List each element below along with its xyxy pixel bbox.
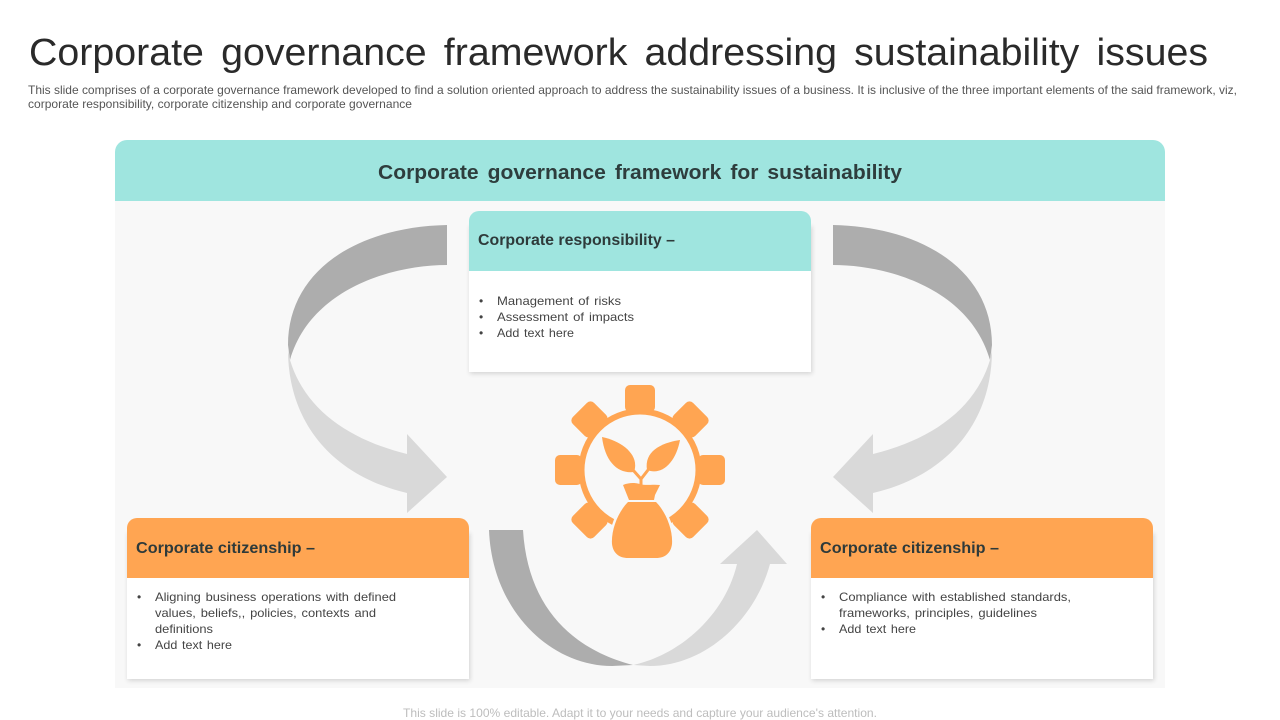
card: corporate responsibility: Management of risks xyxy=(497,294,621,308)
card: corporate citizenship left: values, beliefs,, policies, contexts and xyxy=(155,606,376,620)
card: corporate citizenship right: Compliance with established standards, xyxy=(839,590,1071,604)
card: corporate responsibility: Assessment of impacts xyxy=(497,310,634,324)
card: corporate citizenship left: Aligning business operations with defined xyxy=(155,590,396,604)
card: corporate responsibility: • xyxy=(479,326,483,340)
card: corporate citizenship right: Add text here xyxy=(839,622,916,636)
arrow: top left curved xyxy=(288,225,447,513)
card: corporate citizenship left: • xyxy=(137,638,141,652)
arrow: top right curved xyxy=(833,225,992,513)
card: corporate responsibility: • xyxy=(479,310,483,324)
card: corporate citizenship left: Add text here xyxy=(155,638,232,652)
icon: gear with plant and money bag xyxy=(555,385,725,558)
card: corporate citizenship right xyxy=(811,518,1153,679)
card: corporate citizenship left: Corporate citizenship – xyxy=(136,540,315,557)
panel heading band xyxy=(115,140,1165,201)
card: corporate citizenship left: • xyxy=(137,590,141,604)
card: corporate citizenship left: definitions xyxy=(155,622,213,636)
footer note: This slide is 100% editable. Adapt it to your needs and capture your audience's attention. xyxy=(403,706,877,720)
description text: This slide comprises of a corporate governance framework developed to find a solution oriented approach to address the sustainability issues of a business. It is inclusive of the three important elements of the said framework, viz, xyxy=(28,83,1237,97)
card: corporate responsibility xyxy=(469,211,811,372)
card: corporate citizenship right: Corporate citizenship – xyxy=(820,540,999,557)
card: corporate citizenship right: • xyxy=(821,622,825,636)
card: corporate responsibility: • xyxy=(479,294,483,308)
panel heading band: Corporate governance framework for sustainability xyxy=(378,162,903,184)
card: corporate responsibility: Corporate responsibility – xyxy=(478,232,675,249)
card: corporate citizenship right: frameworks, principles, guidelines xyxy=(839,606,1037,620)
card: corporate responsibility: Add text here xyxy=(497,326,574,340)
panel: framework background xyxy=(115,200,1165,688)
arrow: bottom curved xyxy=(489,530,787,666)
card: corporate citizenship right: • xyxy=(821,590,825,604)
description text: corporate responsibility, corporate citizenship and corporate governance xyxy=(28,97,412,111)
title: Corporate governance framework addressing sustainability issues xyxy=(29,32,1208,74)
description text xyxy=(28,83,1237,111)
card: corporate citizenship left xyxy=(127,518,469,679)
